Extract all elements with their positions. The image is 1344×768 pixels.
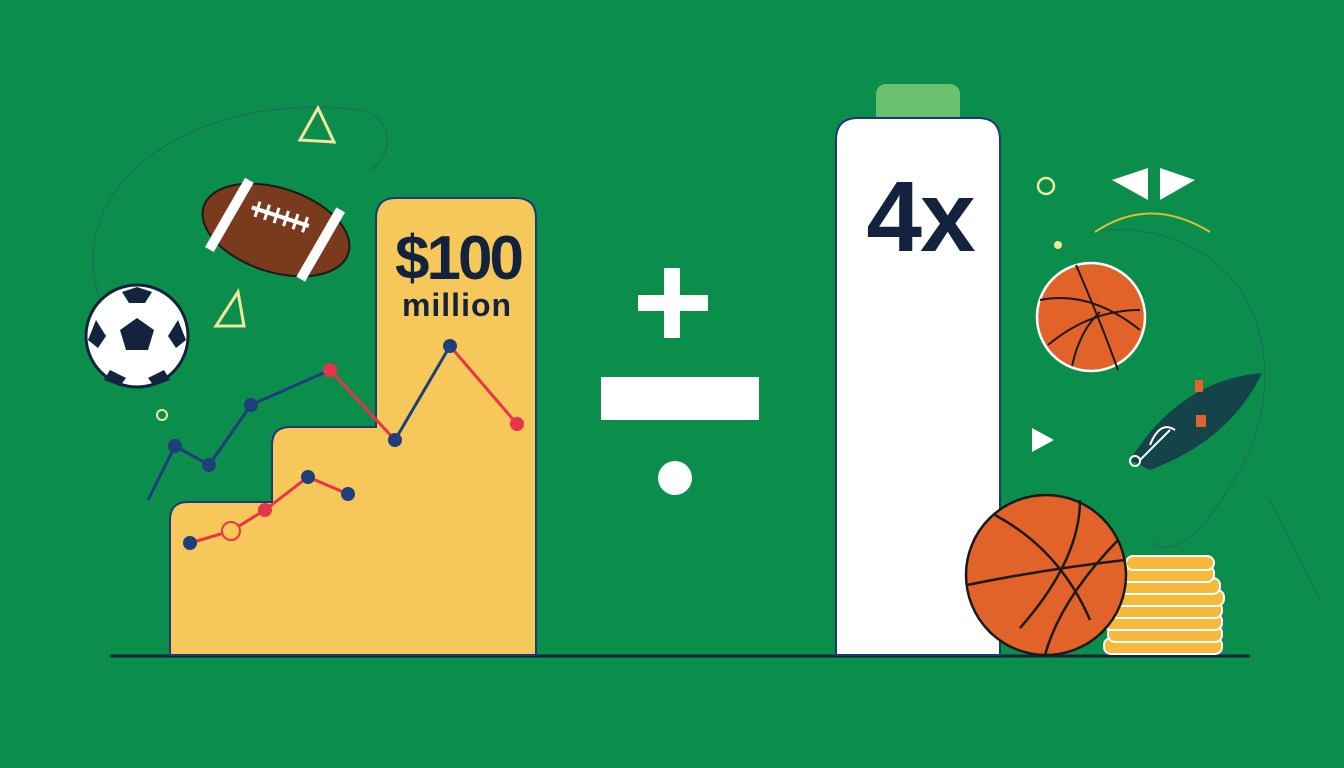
- baseline: [110, 654, 1250, 658]
- dot: [658, 461, 692, 495]
- icon: american football: [191, 167, 361, 293]
- icon: rocket: [1130, 373, 1262, 470]
- decorative sketch lines: [93, 107, 1320, 600]
- value label: $100: [395, 224, 521, 293]
- plus sign: [638, 268, 708, 338]
- stepped yellow bar chart: million: [402, 287, 512, 323]
- minus sign: [601, 377, 759, 420]
- icon: coin stack: [1104, 556, 1224, 654]
- line chart lower: [183, 470, 355, 550]
- decorative triangles: [157, 108, 334, 420]
- 4x label: 4x: [866, 161, 975, 273]
- icon: basketball large: [966, 495, 1126, 655]
- line chart upper: [148, 339, 524, 500]
- icon: basketball small: [1037, 263, 1145, 371]
- small decorations right: [1032, 168, 1210, 452]
- white bar with handle: [836, 84, 1000, 655]
- stepped yellow bar chart: [170, 198, 536, 655]
- icon: soccer ball: [86, 285, 188, 387]
